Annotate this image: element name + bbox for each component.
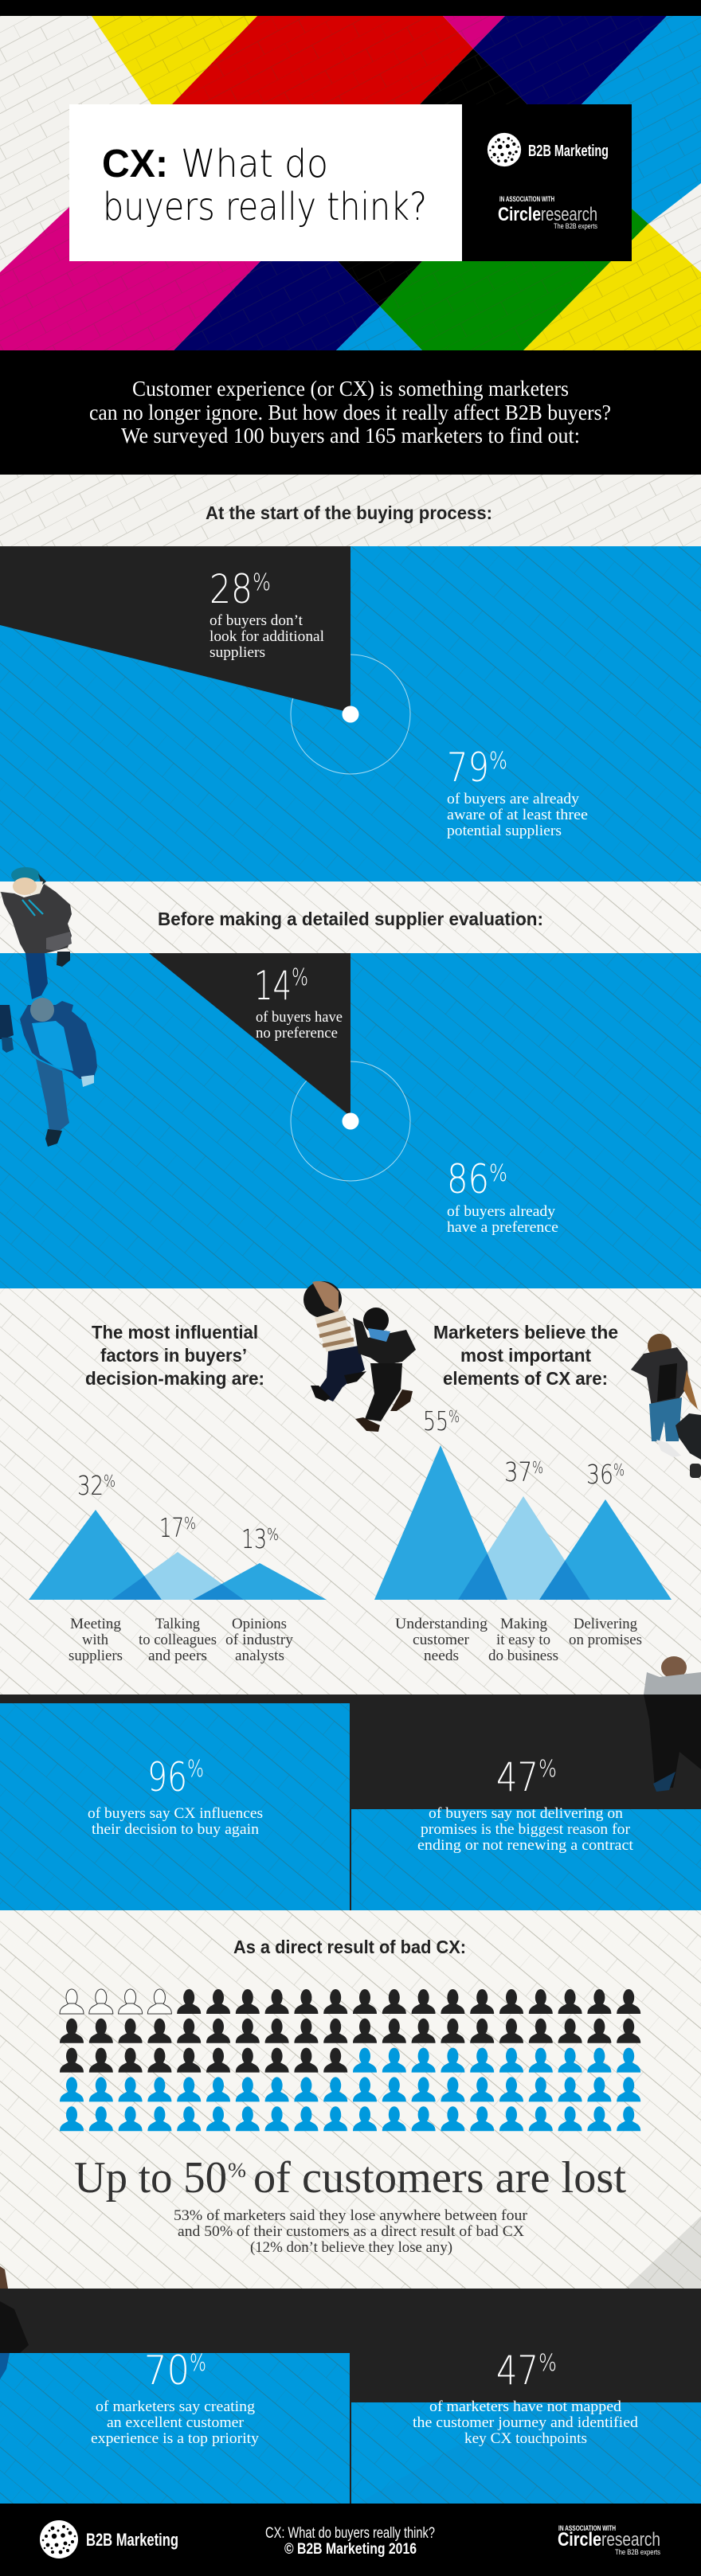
panel: before evaluation pie	[0, 953, 701, 1288]
stat: 14 percent: no preference	[256, 1025, 338, 1042]
chart labels: buyers: suppliers	[69, 1648, 123, 1664]
chart values: buyers	[77, 1470, 279, 1554]
walker in hoodie	[20, 998, 97, 1147]
stat: 28 percent: 28	[210, 566, 253, 612]
footer credit	[265, 2525, 435, 2558]
stat: 96 percent: their decision to buy again	[92, 1821, 260, 1838]
walker with teal hair	[1, 867, 72, 999]
chart labels: buyers: with	[82, 1632, 108, 1648]
stat: 47 percent of marketers: key CX touchpoints	[464, 2430, 587, 2447]
heading: start of the buying process: At the start of the buying process:	[206, 502, 492, 523]
photo: person at left edge	[0, 2266, 29, 2379]
panel: dark and blue stats pair	[0, 1695, 701, 1910]
stat: 14 percent: of buyers have	[256, 1009, 343, 1026]
chart labels: marketers: do business	[488, 1648, 558, 1664]
chart values: buyers: %	[184, 1514, 196, 1533]
chart labels: marketers: needs	[424, 1648, 459, 1664]
footer credit: CX: What do buyers really think?	[265, 2525, 435, 2542]
intro band: We surveyed 100 buyers and 165 marketers to find out:	[121, 424, 580, 448]
chart values: marketers	[423, 1405, 625, 1490]
row 3	[60, 2048, 640, 2073]
stat: 96 percent	[88, 1754, 263, 1838]
icon: B2B Marketing logo	[488, 133, 521, 166]
stat: 79 percent: aware of at least three	[447, 807, 588, 823]
supporting text	[174, 2207, 528, 2256]
heading: buyers' factors	[85, 1322, 264, 1389]
headline: up to 50 percent lost: Up to 50	[74, 2153, 227, 2203]
stat: 14 percent: 14	[254, 963, 292, 1009]
heading: bad CX: As a direct result of bad CX:	[233, 1937, 466, 1957]
chart labels: buyers: Opinions	[232, 1616, 287, 1632]
chart labels: buyers: Talking	[155, 1616, 200, 1632]
supporting text: and 50% of their customers as a direct result of bad CX	[178, 2223, 524, 2240]
stat: 96 percent: %	[187, 1755, 204, 1782]
Circle research wordmark: Circle	[498, 204, 541, 225]
pie centre dot	[343, 1113, 358, 1129]
stat: 14 percent: %	[292, 964, 308, 991]
walker at left edge	[0, 1005, 14, 1053]
stat: 28 percent: of buyers don’t	[210, 612, 304, 629]
footer association logo: IN ASSOCIATION WITH	[558, 2524, 616, 2532]
heading: marketers' elements: most important	[460, 1345, 591, 1366]
stat: 28 percent	[210, 566, 324, 661]
intro band	[0, 350, 701, 475]
heading: buyers' factors: decision-making are:	[85, 1368, 264, 1389]
chart labels: marketers: Making	[500, 1616, 547, 1632]
chart values: marketers: %	[532, 1458, 543, 1477]
B2B Marketing wordmark: B2B Marketing	[528, 143, 609, 160]
stat: 47 percent of buyers: ending or not renewing a contract	[417, 1837, 634, 1854]
title text: buyers really think?	[103, 185, 427, 229]
chart values: marketers: 36	[586, 1459, 613, 1490]
stat: 79 percent: of buyers are already	[447, 791, 580, 807]
heading: marketers' elements	[433, 1322, 618, 1389]
stat: 47 percent of buyers: promises is the biggest reason for	[421, 1821, 631, 1838]
chart values: buyers: 13	[241, 1523, 267, 1554]
chart labels: buyers: Meeting	[70, 1616, 121, 1632]
row 2	[60, 2019, 640, 2043]
stat: 47 percent of buyers: %	[538, 1755, 557, 1782]
stat: 28 percent: suppliers	[210, 644, 265, 661]
pie centre dot	[343, 706, 358, 723]
stat: 47 percent of marketers: 47	[496, 2347, 538, 2394]
stat: 47 percent of marketers	[413, 2347, 639, 2447]
stat: 96 percent: 96	[147, 1754, 187, 1800]
Circle research wordmark: research	[541, 204, 597, 225]
row 1	[60, 1989, 640, 2014]
headline: up to 50 percent lost: of customers are lost	[253, 2153, 626, 2203]
intro band: can no longer ignore. But how does it really affect B2B buyers?	[89, 401, 611, 424]
footer association logo: Circle	[558, 2529, 601, 2551]
supporting text: 53% of marketers said they lose anywhere between four	[174, 2207, 528, 2224]
stat: 86 percent: %	[489, 1159, 507, 1186]
chart labels: buyers: to colleagues	[139, 1632, 217, 1648]
hero: colourful diamond panel	[0, 16, 701, 350]
row 5	[60, 2106, 640, 2131]
title text	[102, 142, 427, 229]
icon array: 100 customers	[60, 1989, 640, 2131]
chart values: buyers: %	[267, 1525, 279, 1544]
stat: 79 percent: %	[489, 747, 507, 774]
chart labels: buyers: and peers	[148, 1648, 207, 1664]
logo panel	[462, 104, 632, 261]
heading: before supplier evaluation: Before making a detailed supplier evaluation:	[158, 909, 543, 929]
photo: man crossing into dark panel	[644, 1656, 701, 1792]
ring	[291, 655, 410, 774]
chart values: marketers: %	[613, 1460, 625, 1480]
footer credit: © B2B Marketing 2016	[284, 2541, 417, 2558]
chart values: marketers: %	[448, 1407, 460, 1426]
photo: couple walking	[304, 1281, 416, 1432]
top black bar	[0, 0, 701, 16]
supporting text: (12% don’t believe they lose any)	[250, 2239, 452, 2256]
stat: 47 percent of buyers: of buyers say not delivering on	[429, 1805, 624, 1822]
icon: footer B2B Marketing logo	[40, 2520, 78, 2558]
footer	[0, 2504, 701, 2576]
triangle chart: marketers' elements	[374, 1445, 672, 1600]
stat: 70 percent: %	[190, 2349, 206, 2376]
stat: 86 percent: of buyers already	[447, 1203, 556, 1220]
Circle research wordmark: The B2B experts	[554, 222, 597, 230]
row 4	[60, 2077, 640, 2101]
stat: 70 percent: 70	[144, 2347, 190, 2394]
wedge: 14 percent	[149, 953, 350, 1116]
heading: marketers' elements: elements of CX are:	[443, 1368, 608, 1389]
headline: up to 50 percent lost	[74, 2153, 626, 2203]
photo: woman with phone and stroller	[631, 1334, 701, 1478]
association label: IN ASSOCIATION WITH	[499, 195, 554, 203]
chart values: buyers: %	[104, 1472, 116, 1491]
panel: start of buying process pie	[0, 546, 701, 881]
stat: 79 percent: potential suppliers	[447, 823, 562, 839]
chart labels: marketers: Understanding	[395, 1616, 488, 1632]
stat: 47 percent of buyers: 47	[496, 1754, 538, 1800]
ring	[291, 1061, 410, 1181]
stat: 86 percent	[447, 1156, 558, 1236]
chart labels: marketers: it easy to	[496, 1632, 550, 1648]
chart values: buyers: 32	[77, 1470, 104, 1501]
footer association logo: research	[601, 2529, 660, 2551]
stat: 70 percent: an excellent customer	[107, 2414, 245, 2431]
title text: CX:	[102, 143, 168, 186]
stat: 96 percent: of buyers say CX influences	[88, 1805, 263, 1822]
stat: 47 percent of marketers: of marketers have not mapped	[429, 2398, 622, 2415]
title text: What do	[181, 142, 328, 186]
chart labels: marketers: on promises	[569, 1632, 642, 1648]
chart labels: buyers: of industry	[225, 1632, 294, 1648]
stat: 47 percent of marketers: the customer journey and identified	[413, 2414, 639, 2431]
stat: 70 percent: of marketers say creating	[96, 2398, 256, 2415]
intro band: Customer experience (or CX) is something marketers	[132, 377, 569, 401]
footer association logo	[558, 2524, 660, 2556]
footer association logo: The B2B experts	[615, 2548, 660, 2556]
stat: 47 percent of marketers: %	[538, 2349, 557, 2376]
stat: 86 percent: 86	[447, 1156, 489, 1202]
triangle chart: buyers' factors	[29, 1510, 327, 1600]
stat: 14 percent	[254, 963, 343, 1042]
stat: 70 percent	[91, 2347, 260, 2447]
headline: up to 50 percent lost: %	[228, 2159, 246, 2182]
page pavement background	[0, 475, 701, 2289]
heading: buyers' factors: The most influential	[92, 1322, 258, 1343]
chart values: buyers: 17	[159, 1512, 184, 1543]
chart labels: marketers: customer	[413, 1632, 470, 1648]
chart labels: buyers	[69, 1616, 294, 1664]
heading: marketers' elements: Marketers believe the	[433, 1322, 618, 1343]
heading: buyers' factors: factors in buyers’	[100, 1345, 247, 1366]
stat: 86 percent: have a preference	[447, 1219, 558, 1236]
stat: 28 percent: %	[253, 569, 271, 596]
chart labels: buyers: analysts	[235, 1648, 284, 1664]
panel: marketers stats pair	[0, 2289, 701, 2504]
chart labels: marketers	[395, 1616, 642, 1664]
chart labels: marketers: Delivering	[574, 1616, 637, 1632]
title box	[69, 104, 462, 261]
wedge: 28 percent	[0, 546, 350, 713]
photo: walkers at left of second section	[0, 867, 97, 1147]
stat: 79 percent	[447, 745, 588, 839]
Circle research wordmark	[498, 204, 597, 230]
stat: 70 percent: experience is a top priority	[91, 2430, 260, 2447]
chart values: marketers: 37	[504, 1456, 532, 1487]
footer B2B Marketing wordmark: B2B Marketing	[86, 2530, 178, 2550]
stat: 47 percent of buyers	[417, 1754, 634, 1854]
stat: 79 percent: 79	[447, 745, 489, 791]
chart values: marketers: 55	[423, 1405, 448, 1437]
stat: 28 percent: look for additional	[210, 628, 324, 645]
